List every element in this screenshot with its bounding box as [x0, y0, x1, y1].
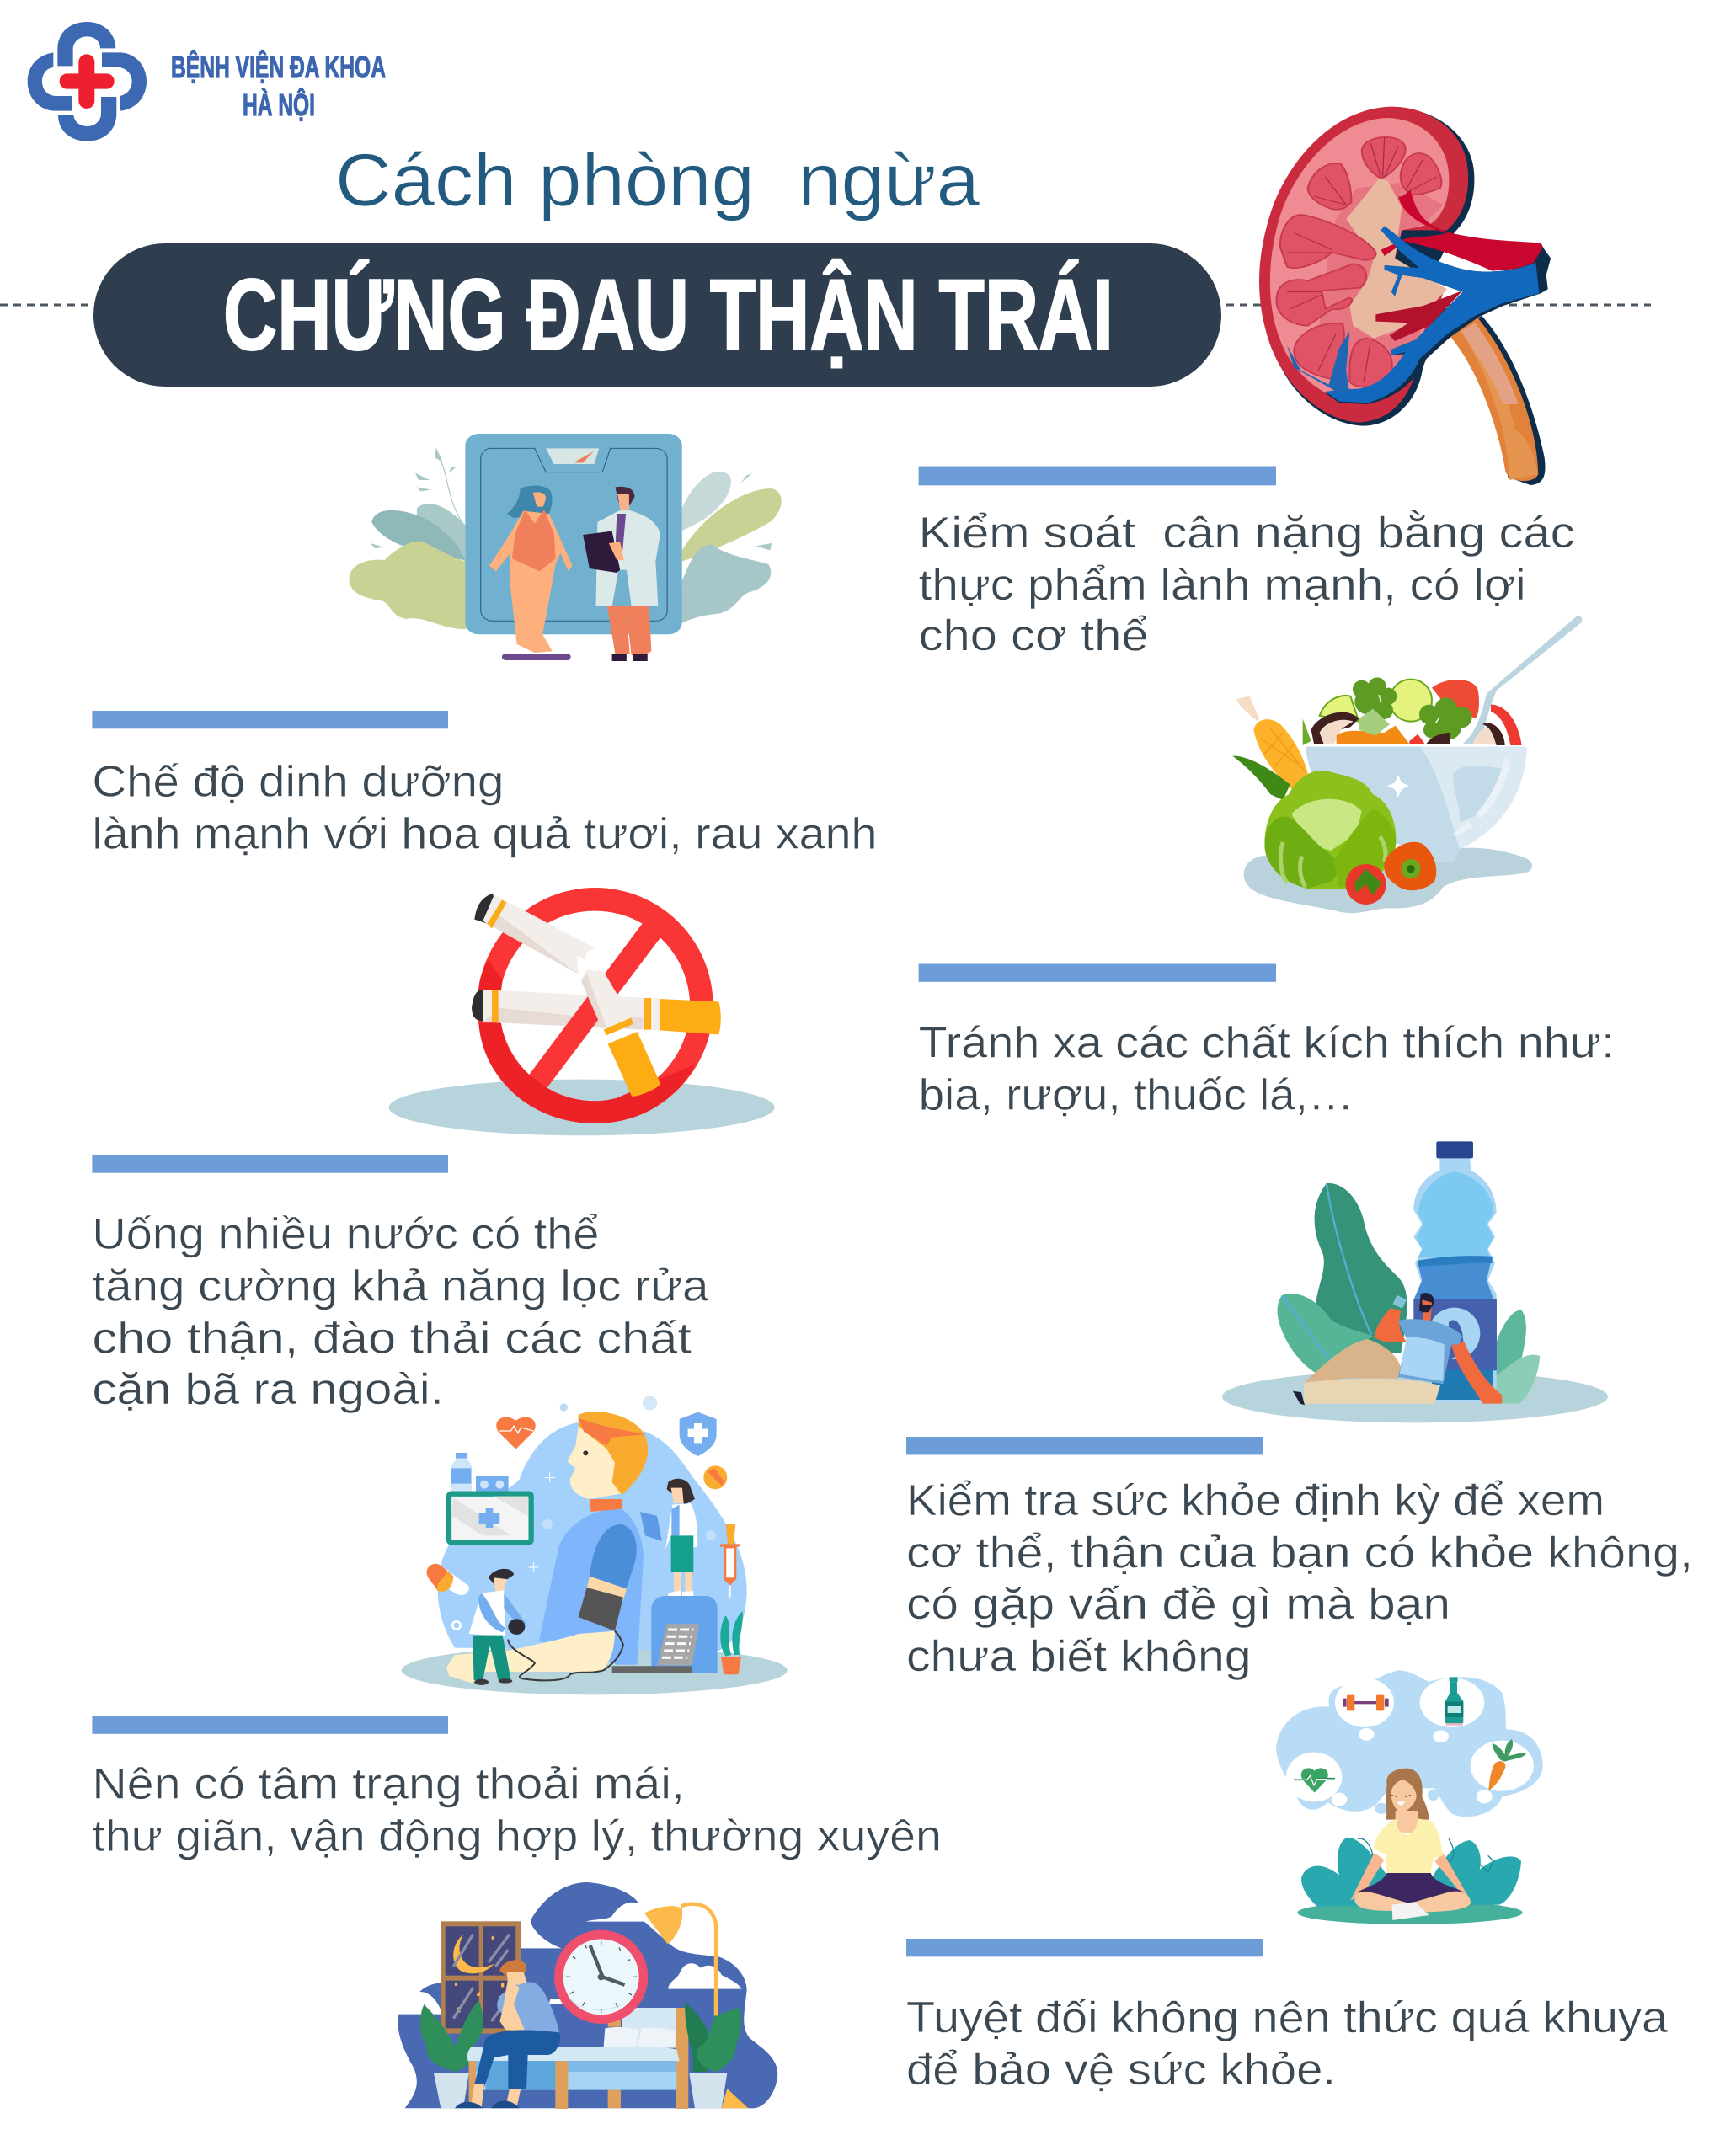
ground shadow [402, 1646, 788, 1694]
doctor [583, 487, 660, 661]
blood vessels [1287, 190, 1551, 404]
illustration: woman meditating with thought cloud [1276, 1670, 1543, 1924]
accent bar [92, 1155, 448, 1173]
bed [467, 2008, 688, 2109]
text block: avoid staying up late: để bảo vệ sức khỏe. [906, 2046, 1336, 2095]
text block: avoid staying up late [906, 1993, 1668, 2095]
heartbeat icon [1294, 1768, 1335, 1793]
medicine bottle [451, 1453, 509, 1493]
logo: Bệnh viện Đa khoa Hà Nội [28, 22, 386, 141]
text block: avoid stimulants [919, 1019, 1615, 1120]
decorative circles and symbols [452, 1396, 740, 1630]
plants [1278, 1183, 1540, 1404]
ureter [1445, 314, 1545, 485]
night background shape [398, 1882, 777, 2108]
medical monitor [449, 1494, 531, 1542]
illustration: weighing scale with patient and doctor [349, 434, 782, 661]
illustration: blood pressure check [402, 1396, 788, 1694]
scale gauge [546, 448, 599, 464]
cigarette lower body [472, 990, 721, 1034]
pyramid streaks [1287, 137, 1437, 382]
cigarette upper broken [474, 894, 595, 974]
accent bar [906, 1437, 1263, 1454]
corn [1232, 696, 1310, 800]
pyramids [1276, 137, 1441, 387]
text block: relax and exercise [92, 1760, 942, 1861]
broken cigarette filter [581, 970, 660, 1097]
illustration: no smoking sign [389, 888, 775, 1135]
right plant [685, 2002, 741, 2108]
thought cloud [1276, 1670, 1543, 1817]
text block: drink water: cặn bã ra ngoài. [92, 1365, 444, 1414]
text block: regular health check: Kiểm tra sức khỏe định kỳ để xem [906, 1476, 1605, 1525]
illustration: man drinking beside water bottle [1222, 1141, 1608, 1422]
patient [446, 1412, 648, 1683]
floor lamp [644, 1904, 748, 2108]
kidney body [1259, 107, 1468, 423]
text block: regular health check: cơ thể, thận của bạn có khỏe không, [906, 1529, 1693, 1577]
diagonal bar of sign over cigarette [529, 924, 660, 1088]
text block: weight control: cho cơ thể [919, 611, 1149, 660]
accent bar [919, 467, 1276, 485]
pill icon [703, 1465, 727, 1489]
text block: healthy diet: lành mạnh với hoa quả tươi, rau xanh [92, 810, 877, 859]
left plant [420, 2000, 483, 2108]
blood pressure base and chart [612, 1596, 718, 1673]
dumbbell icon [1343, 1695, 1389, 1710]
salad vegetables [1303, 677, 1522, 745]
tomato [1346, 864, 1386, 905]
text block: healthy diet: Chế độ dinh dưỡng [92, 758, 504, 807]
small nurse on base [640, 1479, 697, 1596]
text block: weight control: Kiểm soát cân nặng bằng các [919, 509, 1575, 558]
syringe [720, 1524, 740, 1598]
inner columns [1318, 183, 1444, 382]
capsule [426, 1564, 469, 1595]
text block: relax and exercise: Nên có tâm trạng thoải mái, [92, 1760, 685, 1809]
text block: avoid stimulants: bia, rượu, thuốc lá,… [919, 1071, 1354, 1120]
text block: drink water: tăng cường khả năng lọc rửa [92, 1262, 708, 1310]
red pepper [1384, 842, 1436, 890]
meditating woman [1350, 1769, 1471, 1920]
carrot icon [1488, 1739, 1526, 1790]
title banner [93, 243, 1221, 387]
background leaves [349, 448, 782, 629]
text block: avoid stimulants: Tránh xa các chất kích thích như: [919, 1019, 1615, 1068]
text block: relax and exercise: thư giãn, vận động hợp lý, thường xuyên [92, 1812, 942, 1861]
potted plant [720, 1611, 743, 1674]
text block: drink water: cho thận, đào thải các chất [92, 1314, 692, 1363]
man [1293, 1293, 1502, 1405]
text block: weight control [919, 509, 1575, 660]
text block: regular health check: chưa biết không [906, 1632, 1252, 1681]
illustration: person awake at night with clock [398, 1882, 777, 2109]
table shadow [1244, 848, 1532, 913]
window [441, 1921, 521, 2034]
ground shadow [389, 1080, 775, 1135]
kidney cortex [1270, 118, 1449, 402]
illustration: kidney [1259, 107, 1551, 485]
plants and ground [1297, 1838, 1523, 1924]
icon: hospital cross emblem [28, 22, 147, 141]
text block: healthy diet [92, 758, 877, 859]
spoon [1463, 616, 1582, 744]
bowl [1306, 747, 1527, 862]
heart icon [496, 1417, 536, 1449]
subtitle: Cách phòng ngừa [335, 138, 980, 221]
small doctor with pump [469, 1569, 526, 1685]
water bottle icon [1445, 1677, 1463, 1726]
text block: regular health check: có gặp vấn đề gì mà bạn [906, 1580, 1450, 1629]
accent bar [92, 711, 448, 728]
background blob [438, 1422, 747, 1651]
scale body [465, 434, 682, 634]
logo name [171, 49, 386, 122]
accent bar [906, 1939, 1263, 1956]
ground shadow [1222, 1370, 1608, 1422]
text block: drink water [92, 1209, 708, 1414]
shield icon [680, 1412, 717, 1456]
text block: regular health check [906, 1476, 1693, 1681]
text block: weight control: thực phẩm lành mạnh, có lợi [919, 561, 1526, 610]
tired person [455, 1960, 560, 2108]
prohibition sign [478, 888, 713, 1123]
kidney shadow [1274, 108, 1474, 426]
logo name: BỆNH VIỆN ĐA KHOA [171, 49, 386, 84]
title banner: CHỨNG ĐAU THẬN TRÁI [223, 259, 1114, 371]
renal pelvis tissue [1346, 179, 1447, 339]
logo name: HÀ NỘI [243, 87, 315, 122]
text block: drink water: Uống nhiều nước có thể [92, 1209, 599, 1258]
accent bar [92, 1716, 448, 1734]
woman [489, 486, 573, 660]
accent bar [919, 963, 1276, 982]
cabbage [1264, 771, 1396, 889]
clock [554, 1930, 648, 2024]
illustration: salad bowl [1232, 616, 1582, 913]
text block: avoid staying up late: Tuyệt đối không nên thức quá khuya [906, 1993, 1668, 2042]
water bottle [1413, 1141, 1497, 1402]
